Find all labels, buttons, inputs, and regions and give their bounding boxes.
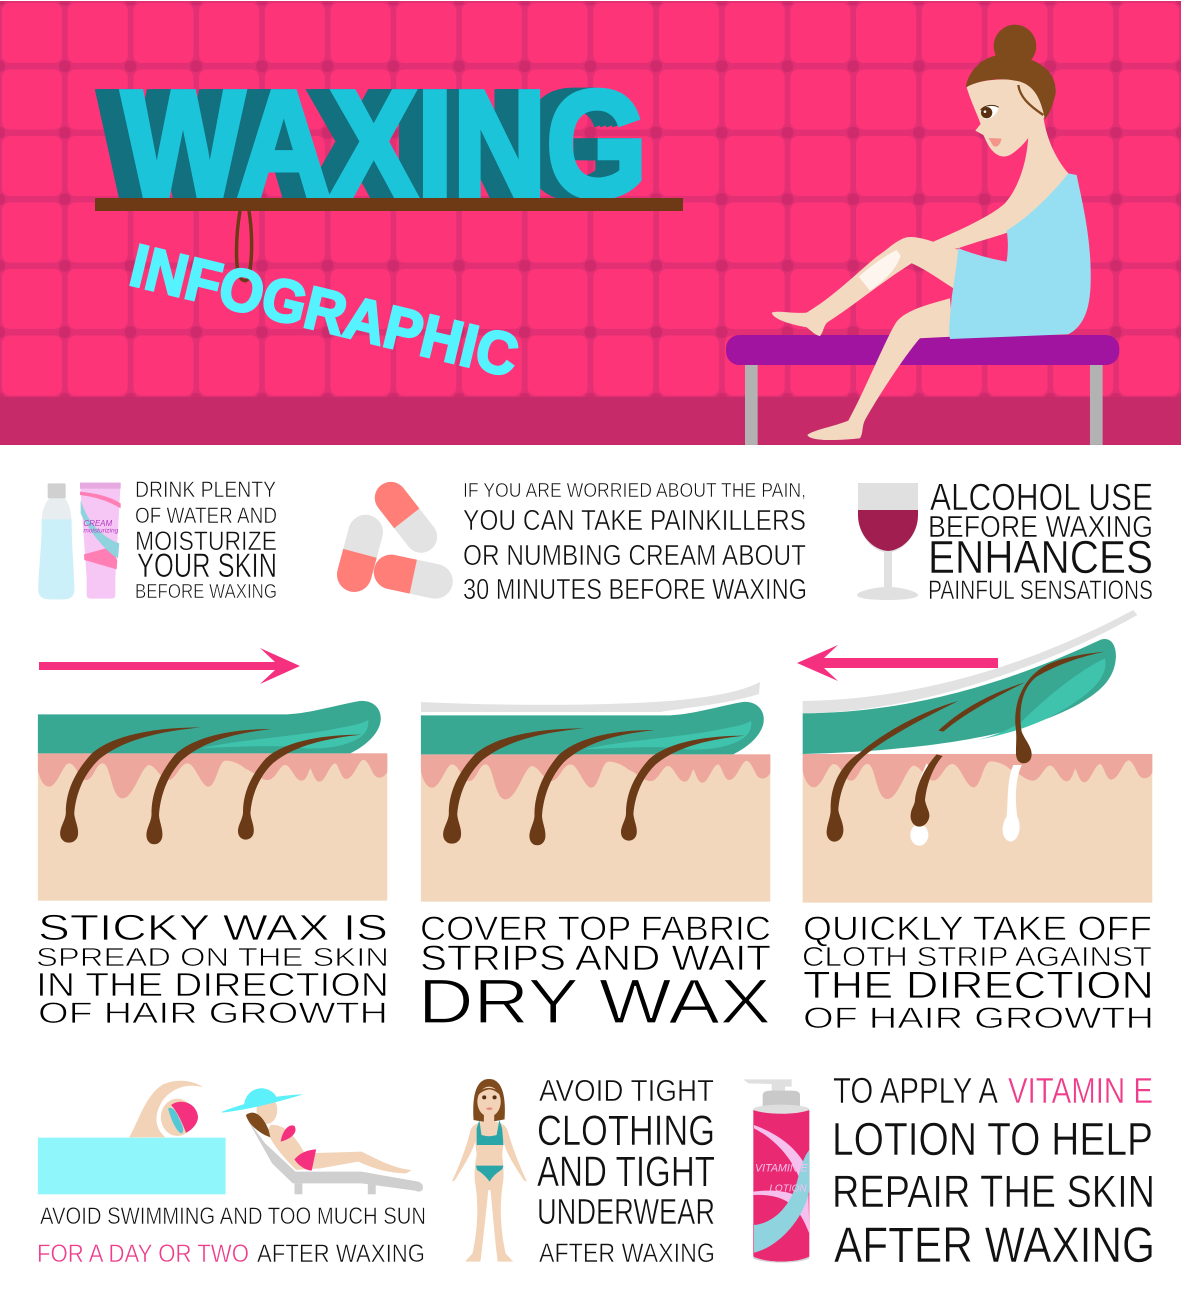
text: drink plenty of water: YOUR SKIN <box>137 547 277 585</box>
text: painkillers advice: OR NUMBING CREAM ABOUT <box>463 540 806 572</box>
arrow: right, hair growth direction <box>39 648 300 684</box>
sunbather head <box>257 1096 277 1124</box>
caption: step 1: STICKY WAX IS <box>38 907 388 948</box>
hair bun <box>994 25 1036 67</box>
caption: step 1: IN THE DIRECTION <box>36 966 389 1003</box>
hair strand around ear <box>1018 85 1043 115</box>
panel: step 3 skin diagram <box>803 610 1152 903</box>
face <box>477 1087 501 1117</box>
face <box>967 79 1045 156</box>
text: avoid tight clothing: AVOID TIGHT <box>539 1073 714 1108</box>
can base <box>753 1257 809 1263</box>
text: vitamin E lotion: VITAMIN E <box>1008 1070 1153 1111</box>
swimmer arm <box>129 1081 203 1137</box>
text: vitamin E lotion: TO APPLY A <box>833 1070 998 1111</box>
caption: step 2: STRIPS AND WAIT <box>420 939 771 978</box>
wax highlight <box>977 658 1106 740</box>
tube teal swoop <box>81 500 119 558</box>
pump collar <box>763 1091 800 1108</box>
text: painkillers advice: YOU CAN TAKE PAINKILLERS <box>463 505 806 537</box>
subtitle: INFOGRAPHIC: INFOGRAPHIC <box>124 232 525 390</box>
swoop light <box>753 1125 809 1233</box>
bottle cap <box>48 483 66 498</box>
sunbather hair <box>246 1113 270 1137</box>
text: avoid tight clothing: AND TIGHT <box>537 1148 715 1196</box>
title: WAXING: WAXING <box>104 59 629 228</box>
illustration: woman in bikini <box>452 1079 527 1262</box>
panel: step 2 skin diagram <box>421 702 770 902</box>
tube pink band <box>84 547 117 569</box>
empty follicles <box>910 763 1022 846</box>
text: avoid swimming: AVOID SWIMMING AND TOO MUCH SUN <box>40 1203 426 1230</box>
arrow: left, pull direction <box>797 645 998 681</box>
can body <box>753 1110 809 1262</box>
eye <box>981 105 999 119</box>
eyes <box>482 1095 497 1099</box>
caption: step 1: SPREAD ON THE SKIN <box>36 942 389 972</box>
fabric strip, step 2 <box>421 682 760 712</box>
title: WAXING: WAXING <box>122 59 647 228</box>
hair <box>966 54 1056 119</box>
text: painkillers advice: 30 MINUTES BEFORE WAXING <box>463 574 807 606</box>
title: WAXING: WAXING <box>98 59 623 228</box>
panel: step 1 skin diagram <box>38 701 387 901</box>
caption: step 2 <box>418 910 771 1037</box>
text: avoid swimming <box>37 1203 426 1268</box>
lips <box>989 138 1002 147</box>
text: alcohol warning: ENHANCES <box>928 531 1153 583</box>
text: avoid swimming: AFTER WAXING <box>257 1240 425 1268</box>
bottle body <box>38 498 74 599</box>
capsule right <box>371 551 456 602</box>
swimmer head <box>161 1099 194 1136</box>
pool water <box>38 1138 226 1194</box>
text: painkillers advice: IF YOU ARE WORRIED ABOUT THE PAIN, <box>463 480 806 502</box>
caption: step 2: DRY WAX <box>418 967 771 1037</box>
caption: step 3 <box>802 910 1154 1035</box>
capsule top <box>368 475 444 559</box>
goggles <box>168 1108 183 1133</box>
icon: painkiller capsules <box>333 475 456 602</box>
caption: step 3: OF HAIR GROWTH <box>803 1002 1154 1035</box>
caption: step 1 <box>36 907 389 1030</box>
icon: vitamin E lotion bottle <box>743 1079 809 1263</box>
title: WAXING: WAXING <box>116 59 641 228</box>
raised leg <box>772 237 963 336</box>
sunbather body <box>267 1125 412 1173</box>
wax layer <box>38 701 381 753</box>
back hair <box>473 1079 505 1122</box>
shelf <box>95 198 683 211</box>
bikini <box>476 1120 504 1182</box>
tube <box>80 483 121 599</box>
text: avoid tight clothing <box>537 1073 715 1268</box>
wax strip on leg <box>859 250 901 291</box>
illustration: swimmer and sunbather <box>38 1081 423 1194</box>
caption: step 3: QUICKLY TAKE OFF <box>803 910 1152 948</box>
tube top <box>80 483 121 489</box>
lower leg <box>807 298 953 440</box>
sun hat <box>222 1088 303 1113</box>
mouth <box>486 1107 492 1110</box>
wine <box>858 510 918 551</box>
capsule left <box>333 511 387 596</box>
hairs <box>60 727 362 844</box>
text: drink plenty of water: BEFORE WAXING <box>135 581 277 603</box>
icon: water bottle and cream tube: moisturizing <box>83 528 119 535</box>
floor band <box>0 397 1181 445</box>
neck and arm <box>933 117 1075 249</box>
panel: pink tiled header <box>0 1 1181 445</box>
hairs <box>827 652 1105 842</box>
caption: step 1: OF HAIR GROWTH <box>38 997 388 1030</box>
text: drink plenty of water: OF WATER AND <box>135 503 277 528</box>
text: vitamin E lotion <box>832 1070 1155 1273</box>
text: painkillers advice <box>463 480 807 606</box>
text: alcohol warning: BEFORE WAXING <box>928 509 1153 544</box>
illustration: woman waxing on a bench <box>726 25 1119 445</box>
text: alcohol warning <box>928 477 1153 605</box>
wax layer <box>803 639 1116 754</box>
fabric strip <box>803 610 1137 713</box>
bottle water <box>38 519 74 599</box>
text: avoid swimming: FOR A DAY OR TWO <box>37 1240 249 1268</box>
fringe <box>477 1088 502 1097</box>
icon: water bottle and cream tube <box>38 483 121 599</box>
text: drink plenty of water <box>135 477 277 603</box>
icon: vitamin E lotion bottle: LOTION <box>769 1184 807 1195</box>
text: avoid tight clothing: UNDERWEAR <box>537 1191 715 1232</box>
text: drink plenty of water: DRINK PLENTY <box>135 477 276 502</box>
text: avoid tight clothing: AFTER WAXING <box>539 1238 715 1268</box>
caption: step 3: THE DIRECTION <box>803 965 1154 1007</box>
caption: step 3: CLOTH STRIP AGAINST <box>802 941 1152 972</box>
text: drink plenty of water: MOISTURIZE <box>135 526 277 556</box>
body <box>452 1113 527 1262</box>
text: avoid tight clothing: CLOTHING <box>537 1107 715 1155</box>
towel <box>949 173 1091 339</box>
pump nozzle <box>743 1079 792 1093</box>
can top <box>753 1105 809 1114</box>
hairs <box>443 728 745 845</box>
bench seat <box>726 335 1119 365</box>
title: WAXING: WAXING <box>110 59 635 228</box>
tube label: CREAM <box>83 519 113 528</box>
wax layer <box>421 702 764 754</box>
lounge chair <box>247 1119 423 1194</box>
wax highlight <box>584 721 751 750</box>
icon: wine glass <box>857 483 918 600</box>
swim cap <box>171 1102 198 1133</box>
string loop <box>236 211 252 281</box>
wax highlight <box>201 720 368 749</box>
label: VITAMIN E <box>755 1163 808 1175</box>
bench legs <box>745 363 1103 445</box>
swoop blue <box>754 1150 809 1253</box>
caption: step 2: COVER TOP FABRIC <box>420 910 771 948</box>
bikini <box>281 1125 316 1171</box>
